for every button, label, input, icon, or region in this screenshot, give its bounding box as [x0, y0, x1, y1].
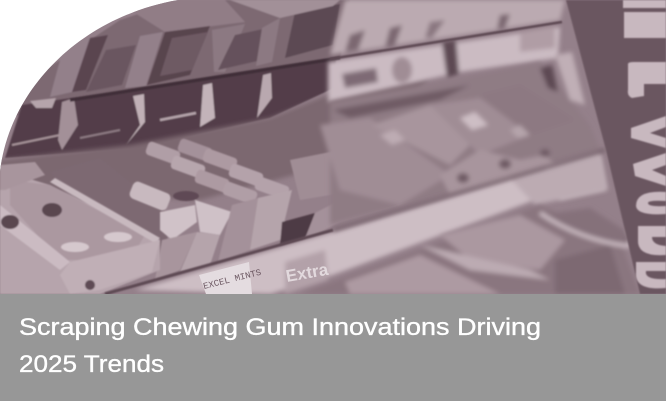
title: Scraping Chewing Gum Innovations Driving [19, 314, 541, 341]
photo: gum shelves with mauve duotone [0, 0, 666, 294]
mint tin lids rows [84, 138, 332, 250]
lower-right blurred gum packs [300, 205, 640, 294]
lower-left price tag text: Extra [284, 260, 330, 286]
tall mint boxes [129, 180, 334, 278]
lower-left price tag text: EXCEL MINTS [202, 268, 262, 292]
lower-left soft box display [0, 162, 160, 294]
upper dark roller band [5, 58, 340, 158]
lower-left price tag text [199, 260, 330, 294]
blurred sign letters [623, 0, 666, 288]
upper-left gum packs [0, 0, 350, 120]
caption panel [0, 294, 666, 401]
shelf rail [105, 230, 333, 294]
upper-right light shelf packs [328, 0, 565, 102]
lower-right light price rail [135, 152, 608, 294]
right dark sign column [566, 0, 666, 294]
middle shelf shadow [0, 78, 430, 200]
middle-right blurred gum rows [320, 52, 605, 225]
title [19, 314, 541, 378]
title: 2025 Trends [19, 351, 164, 378]
